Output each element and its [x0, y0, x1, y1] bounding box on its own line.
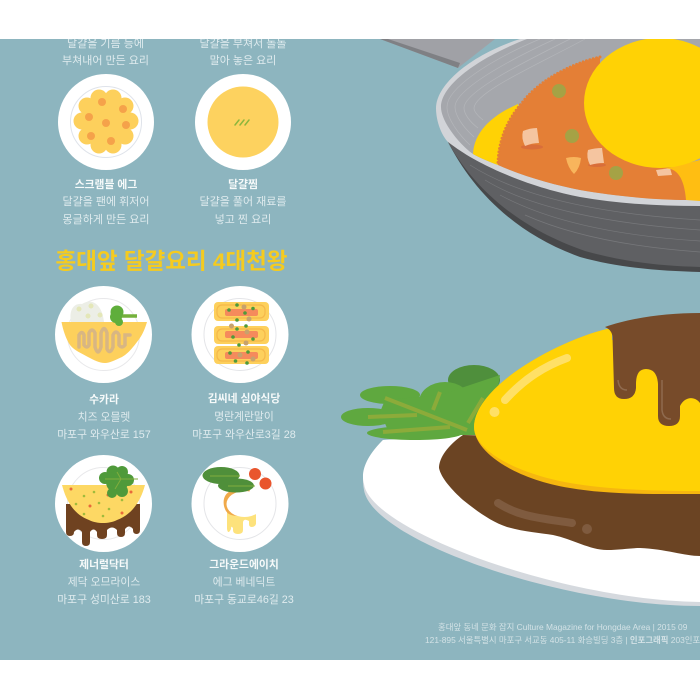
- demi-glace sauce: [439, 435, 700, 556]
- footer text: 홍대앞 동네 문화 잡지 Culture Magazine for Hongdae Area | 2015 09: [438, 622, 688, 632]
- text: scrambled egg: [62, 178, 150, 226]
- pan rim and interior: [436, 39, 700, 206]
- text: ground H: [194, 558, 294, 606]
- text: scrambled egg: 스크램블 에그: [75, 178, 137, 191]
- icon: rolled omelet with pollock roe: [192, 286, 288, 383]
- omelet highlight: [490, 358, 567, 417]
- illustration: frying pan with omelet rice: [380, 38, 700, 272]
- text: top right description: [199, 37, 287, 67]
- footer text: 121-895 서울특별시 마포구 서교동 405-11 화승빌딩 3층 | 인포그래픽 203인포: [425, 635, 700, 645]
- text: scrambled egg: 몽글하게 만든 요리: [62, 212, 150, 226]
- sauce highlight: [498, 503, 592, 534]
- icon: steamed egg plate: [195, 74, 291, 170]
- text: general doctor: 마포구 성미산로 183: [57, 593, 151, 606]
- text: top left description: [62, 37, 149, 67]
- omelet edge in pan: [473, 104, 525, 165]
- icon: sukara cheese omelet: [55, 286, 152, 383]
- fried egg yolk: [584, 38, 700, 201]
- text: general doctor: 제닥 오므라이스: [68, 576, 140, 588]
- text: ground H: 마포구 동교로46길 23: [194, 593, 294, 606]
- text: steamed egg: 넣고 찐 요리: [215, 213, 271, 226]
- text: sukara: 수카라: [89, 392, 119, 406]
- icon: ground H eggs benedict: [192, 455, 288, 552]
- text: sukara: 마포구 와우산로 157: [57, 428, 151, 441]
- text: kim's late night diner: [192, 392, 296, 441]
- text: scrambled egg: 달걀을 팬에 휘저어: [62, 195, 150, 208]
- text: top right description: 말아 놓은 요리: [210, 54, 276, 67]
- text: steamed egg: 달걀을 풀어 재료를: [199, 195, 287, 208]
- text: top left description: 부쳐내어 만든 요리: [62, 54, 149, 67]
- sauce on top with drips: [605, 313, 700, 426]
- text: top right description: 달걀을 부쳐서 돌돌: [199, 37, 287, 50]
- text: sukara: [57, 392, 151, 441]
- plate: [363, 420, 700, 606]
- text: top left description: 달걀을 기름 등에: [67, 37, 144, 50]
- text: kim's late night diner: 김씨네 심야식당: [208, 392, 280, 405]
- icon: scrambled egg plate: [58, 74, 154, 170]
- heading: 홍대앞 달걀요리 4대천왕: [55, 249, 288, 274]
- omelet: [474, 329, 700, 494]
- footer text: [425, 622, 700, 645]
- pan handle: [380, 39, 495, 68]
- text: steamed egg: 달걀찜: [228, 177, 258, 191]
- icon: general doctor jeduk omurice: [55, 455, 152, 552]
- text: kim's late night diner: 마포구 와우산로3길 28: [192, 428, 296, 441]
- text: ground H: 에그 베네딕트: [213, 576, 275, 588]
- parsley garnish: [341, 365, 500, 440]
- text: general doctor: [57, 557, 151, 606]
- text: ground H: 그라운드에이치: [209, 558, 279, 571]
- text: steamed egg: [199, 177, 287, 226]
- fried rice: [498, 57, 686, 200]
- illustration: omurice on plate: [341, 313, 700, 606]
- pan outer body: [448, 142, 700, 272]
- text: general doctor: 제너럴닥터: [79, 557, 129, 571]
- text: sukara: 치즈 오믈렛: [78, 410, 130, 424]
- text: kim's late night diner: 명란계란말이: [214, 410, 274, 423]
